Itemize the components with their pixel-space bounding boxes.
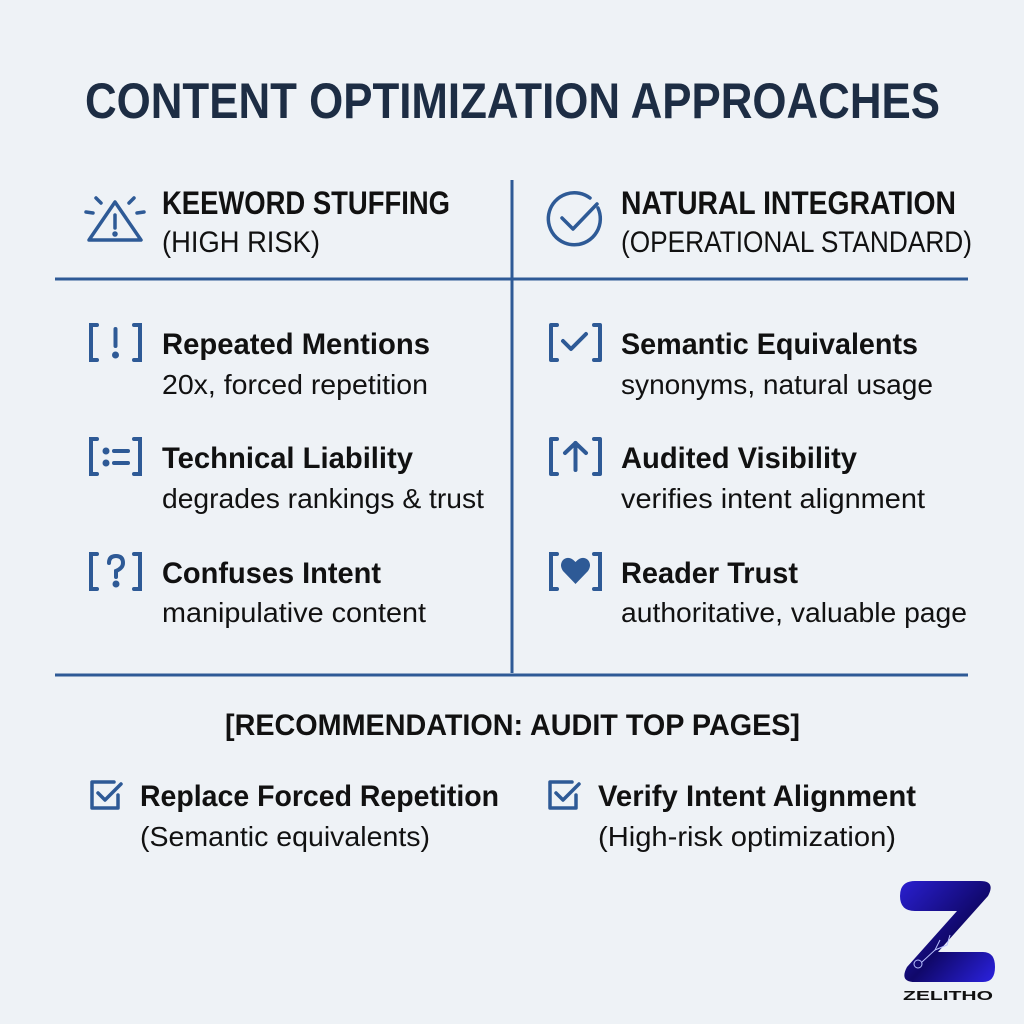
item: semantic equivalents: synonyms, natural usage	[621, 369, 933, 400]
action: replace forced repetition: (Semantic equivalents)	[140, 821, 430, 852]
recommendation heading: [RECOMMENDATION: AUDIT TOP PAGES]	[225, 709, 800, 742]
icon: bracket check	[551, 325, 600, 360]
item: confuses intent: manipulative content	[162, 597, 426, 628]
logo: zelitho	[900, 881, 995, 1003]
action: verify intent alignment	[550, 780, 916, 852]
right items	[551, 325, 967, 628]
icon: bracket arrow up	[551, 439, 600, 474]
item: semantic equivalents: Semantic Equivalents	[621, 328, 918, 361]
item: technical liability: degrades rankings & trust	[162, 483, 484, 514]
left items	[91, 325, 484, 628]
item: semantic equivalents	[551, 325, 933, 400]
icon: checkbox	[550, 782, 579, 808]
item: audited visibility: Audited Visibility	[621, 442, 857, 475]
item: repeated mentions	[91, 325, 430, 400]
action: replace forced repetition: Replace Forced Repetition	[140, 780, 499, 813]
icon: warning	[86, 198, 144, 240]
item: repeated mentions: 20x, forced repetition	[162, 369, 428, 400]
icon: check circle	[548, 193, 600, 245]
action: replace forced repetition	[92, 780, 499, 852]
action: verify intent alignment: Verify Intent Alignment	[598, 780, 916, 813]
icon: bracket list	[91, 439, 140, 474]
logo: zelitho: ZELITHO	[903, 988, 993, 1003]
header: natural integration: NATURAL INTEGRATION	[621, 185, 956, 221]
item: confuses intent: Confuses Intent	[162, 557, 381, 590]
icon: checkbox	[92, 782, 121, 808]
icon: bracket exclamation	[91, 325, 140, 360]
header: natural integration	[548, 185, 972, 259]
header: keyword stuffing: KEEWORD STUFFING	[162, 185, 450, 221]
item: reader trust	[551, 554, 967, 628]
header: keyword stuffing: (HIGH RISK)	[162, 226, 320, 259]
item: reader trust: Reader Trust	[621, 557, 798, 590]
icon: bracket question	[91, 554, 140, 589]
item: repeated mentions: Repeated Mentions	[162, 328, 430, 361]
item: audited visibility: verifies intent alignment	[621, 483, 925, 514]
header: natural integration: (OPERATIONAL STANDARD)	[621, 226, 972, 259]
header: keyword stuffing	[86, 185, 450, 259]
item: confuses intent	[91, 554, 426, 628]
item: reader trust: authoritative, valuable page	[621, 597, 967, 628]
item: technical liability: Technical Liability	[162, 442, 413, 475]
icon: bracket heart	[551, 554, 600, 589]
item: technical liability	[91, 439, 484, 514]
item: audited visibility	[551, 439, 925, 514]
action: verify intent alignment: (High-risk optimization)	[598, 821, 896, 852]
